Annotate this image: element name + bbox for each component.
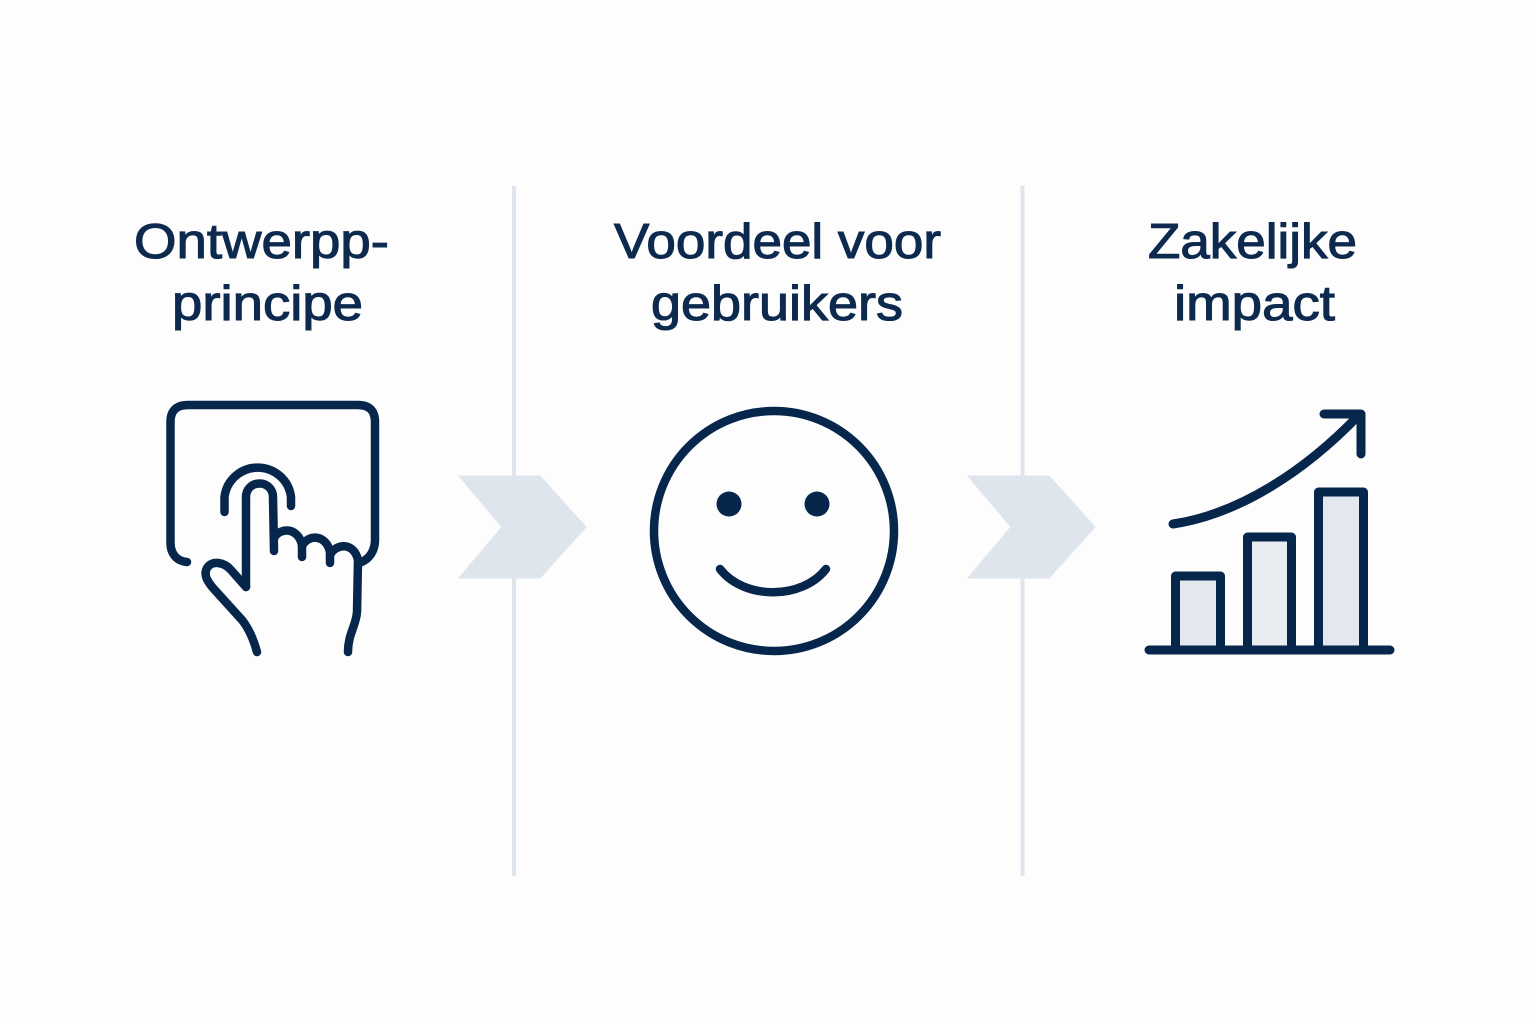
icon: rising bar chart with arrow [1149, 414, 1390, 650]
arrow head [1324, 414, 1361, 454]
baseline [1149, 646, 1390, 654]
arrow: chevron 1 [459, 476, 586, 578]
heading: Zakelijke impact: impact [1174, 277, 1335, 331]
heading: Ontwerpprincipe [134, 215, 389, 331]
eye: left [716, 492, 742, 516]
heading: Ontwerpprincipe: principe [172, 277, 363, 331]
bar 1 [1176, 576, 1220, 650]
mouth [720, 569, 826, 592]
heading: Voordeel voor gebruikers: gebruikers [651, 277, 903, 331]
icon: smiley face [654, 411, 894, 651]
trend arrow [1173, 416, 1358, 524]
heading: Zakelijke impact [1148, 215, 1357, 331]
arrow: chevron 2 [968, 476, 1095, 578]
bar 2 [1248, 537, 1292, 650]
heading: Voordeel voor gebruikers: Voordeel voor [614, 215, 941, 269]
heading: Voordeel voor gebruikers [614, 215, 941, 331]
heading: Zakelijke impact: Zakelijke [1148, 215, 1357, 269]
icon: hand tapping a touch screen [170, 405, 375, 652]
eye: right [804, 492, 830, 516]
heading: Ontwerpprincipe: Ontwerpp- [134, 215, 389, 269]
bar 3 [1318, 492, 1364, 650]
